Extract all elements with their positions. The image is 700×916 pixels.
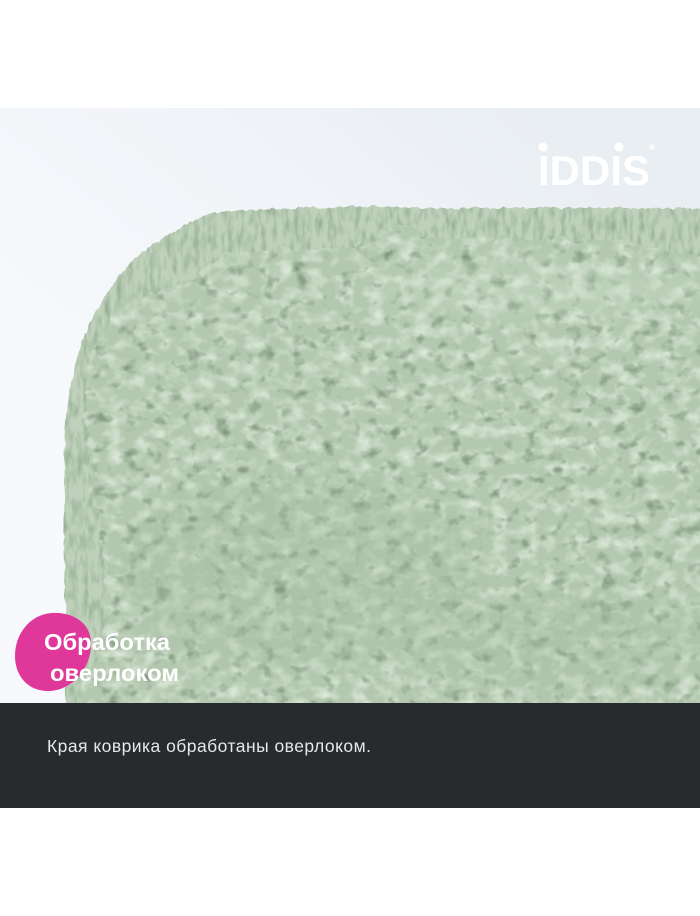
mat: dark pile gaps — [188, 467, 563, 594]
caption bar — [0, 703, 700, 808]
photo background — [0, 108, 700, 703]
mat pile — [76, 224, 700, 720]
caption text: Края коврика обработаны оверлоком. — [47, 736, 371, 756]
photo: green bath mat corner — [64, 206, 700, 720]
cover strip above the caption bar — [0, 700, 66, 703]
logo: IDDIS: IDDIS — [538, 147, 650, 194]
pink blob — [15, 613, 91, 691]
badge: pink blob with heading — [15, 613, 179, 691]
mat shading — [120, 266, 700, 690]
badge heading — [44, 629, 179, 686]
mat overlock border — [64, 206, 700, 707]
white page strip below the bar — [0, 808, 700, 916]
badge heading: оверлоком — [50, 660, 179, 686]
badge heading: Обработка — [44, 629, 170, 655]
